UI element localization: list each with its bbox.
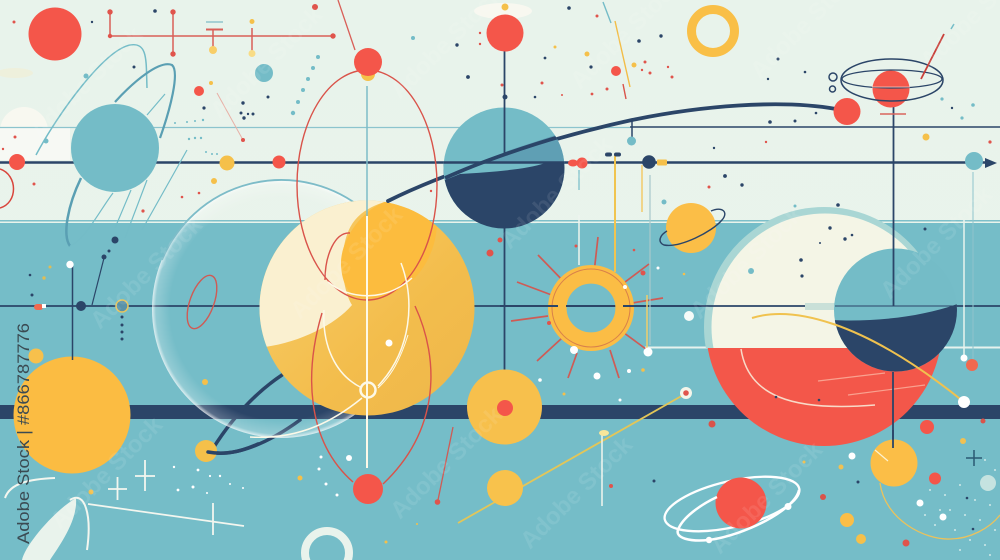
large navy band [0, 405, 1000, 419]
repeating watermark: Adobe Stock [45, 411, 168, 534]
planet: top-left red [28, 8, 82, 60]
top sticks [603, 2, 630, 99]
stem and top red node [486, 4, 524, 375]
clouds [0, 3, 532, 160]
repeating watermark: Adobe Stock [875, 181, 998, 304]
repeating watermark: Adobe Stock [705, 436, 828, 559]
top ring [692, 10, 734, 52]
repeating watermark: Adobe Stock [385, 401, 508, 524]
repeating watermark: Adobe Stock [85, 211, 208, 334]
top ellipse and lower ellipse [297, 70, 437, 484]
top-left bracket chart [107, 0, 355, 57]
planet: blue with orbits [36, 45, 187, 246]
teal dot chain [174, 55, 320, 155]
repeating watermark: Adobe Stock [285, 201, 408, 324]
scattered dots [91, 6, 953, 187]
white orbit details [250, 216, 412, 468]
small ringed yellow planet [660, 203, 725, 253]
right vertical stems [835, 101, 1000, 448]
axis markers and hanging lines [568, 120, 667, 350]
lower navy swoosh [208, 375, 300, 453]
left yellow planet [14, 236, 208, 474]
repeating watermark: Adobe Stock [25, 21, 148, 144]
cream feather [22, 498, 76, 560]
half blue sphere [444, 108, 564, 228]
small lower-right dots [652, 418, 996, 546]
top-left small planets on axis [9, 81, 286, 184]
large right planet [700, 203, 944, 447]
right half sphere [834, 248, 957, 372]
cross mark [966, 450, 982, 466]
bottom ring [305, 531, 349, 560]
arrow head [985, 158, 997, 168]
golden comet curve [752, 314, 970, 408]
red stick [435, 427, 453, 505]
yellow target [467, 370, 542, 444]
thin horizontal lines [0, 127, 1000, 348]
repeating watermark: Adobe Stock [495, 131, 618, 254]
sun ring [500, 237, 700, 378]
yellow comet with white stem [458, 387, 692, 523]
far right hanging lines [684, 152, 983, 371]
red nodes on ellipses [353, 48, 383, 504]
speckled star field [924, 459, 996, 556]
ringed red planet [660, 466, 804, 543]
lower yellow planet with arc [870, 430, 1000, 539]
bottom-left sketches [5, 460, 244, 550]
top-right saturn [829, 59, 943, 114]
bubble planet [152, 180, 410, 438]
repeating watermark: Adobe Stock [515, 431, 638, 554]
repeating watermark: Adobe Stock [205, 1, 328, 124]
repeating watermark: Adobe Stock [685, 201, 808, 324]
watermark id: Adobe Stock | #866787776 [14, 323, 33, 544]
long navy arc [388, 104, 836, 201]
large yellow planet [260, 200, 474, 416]
